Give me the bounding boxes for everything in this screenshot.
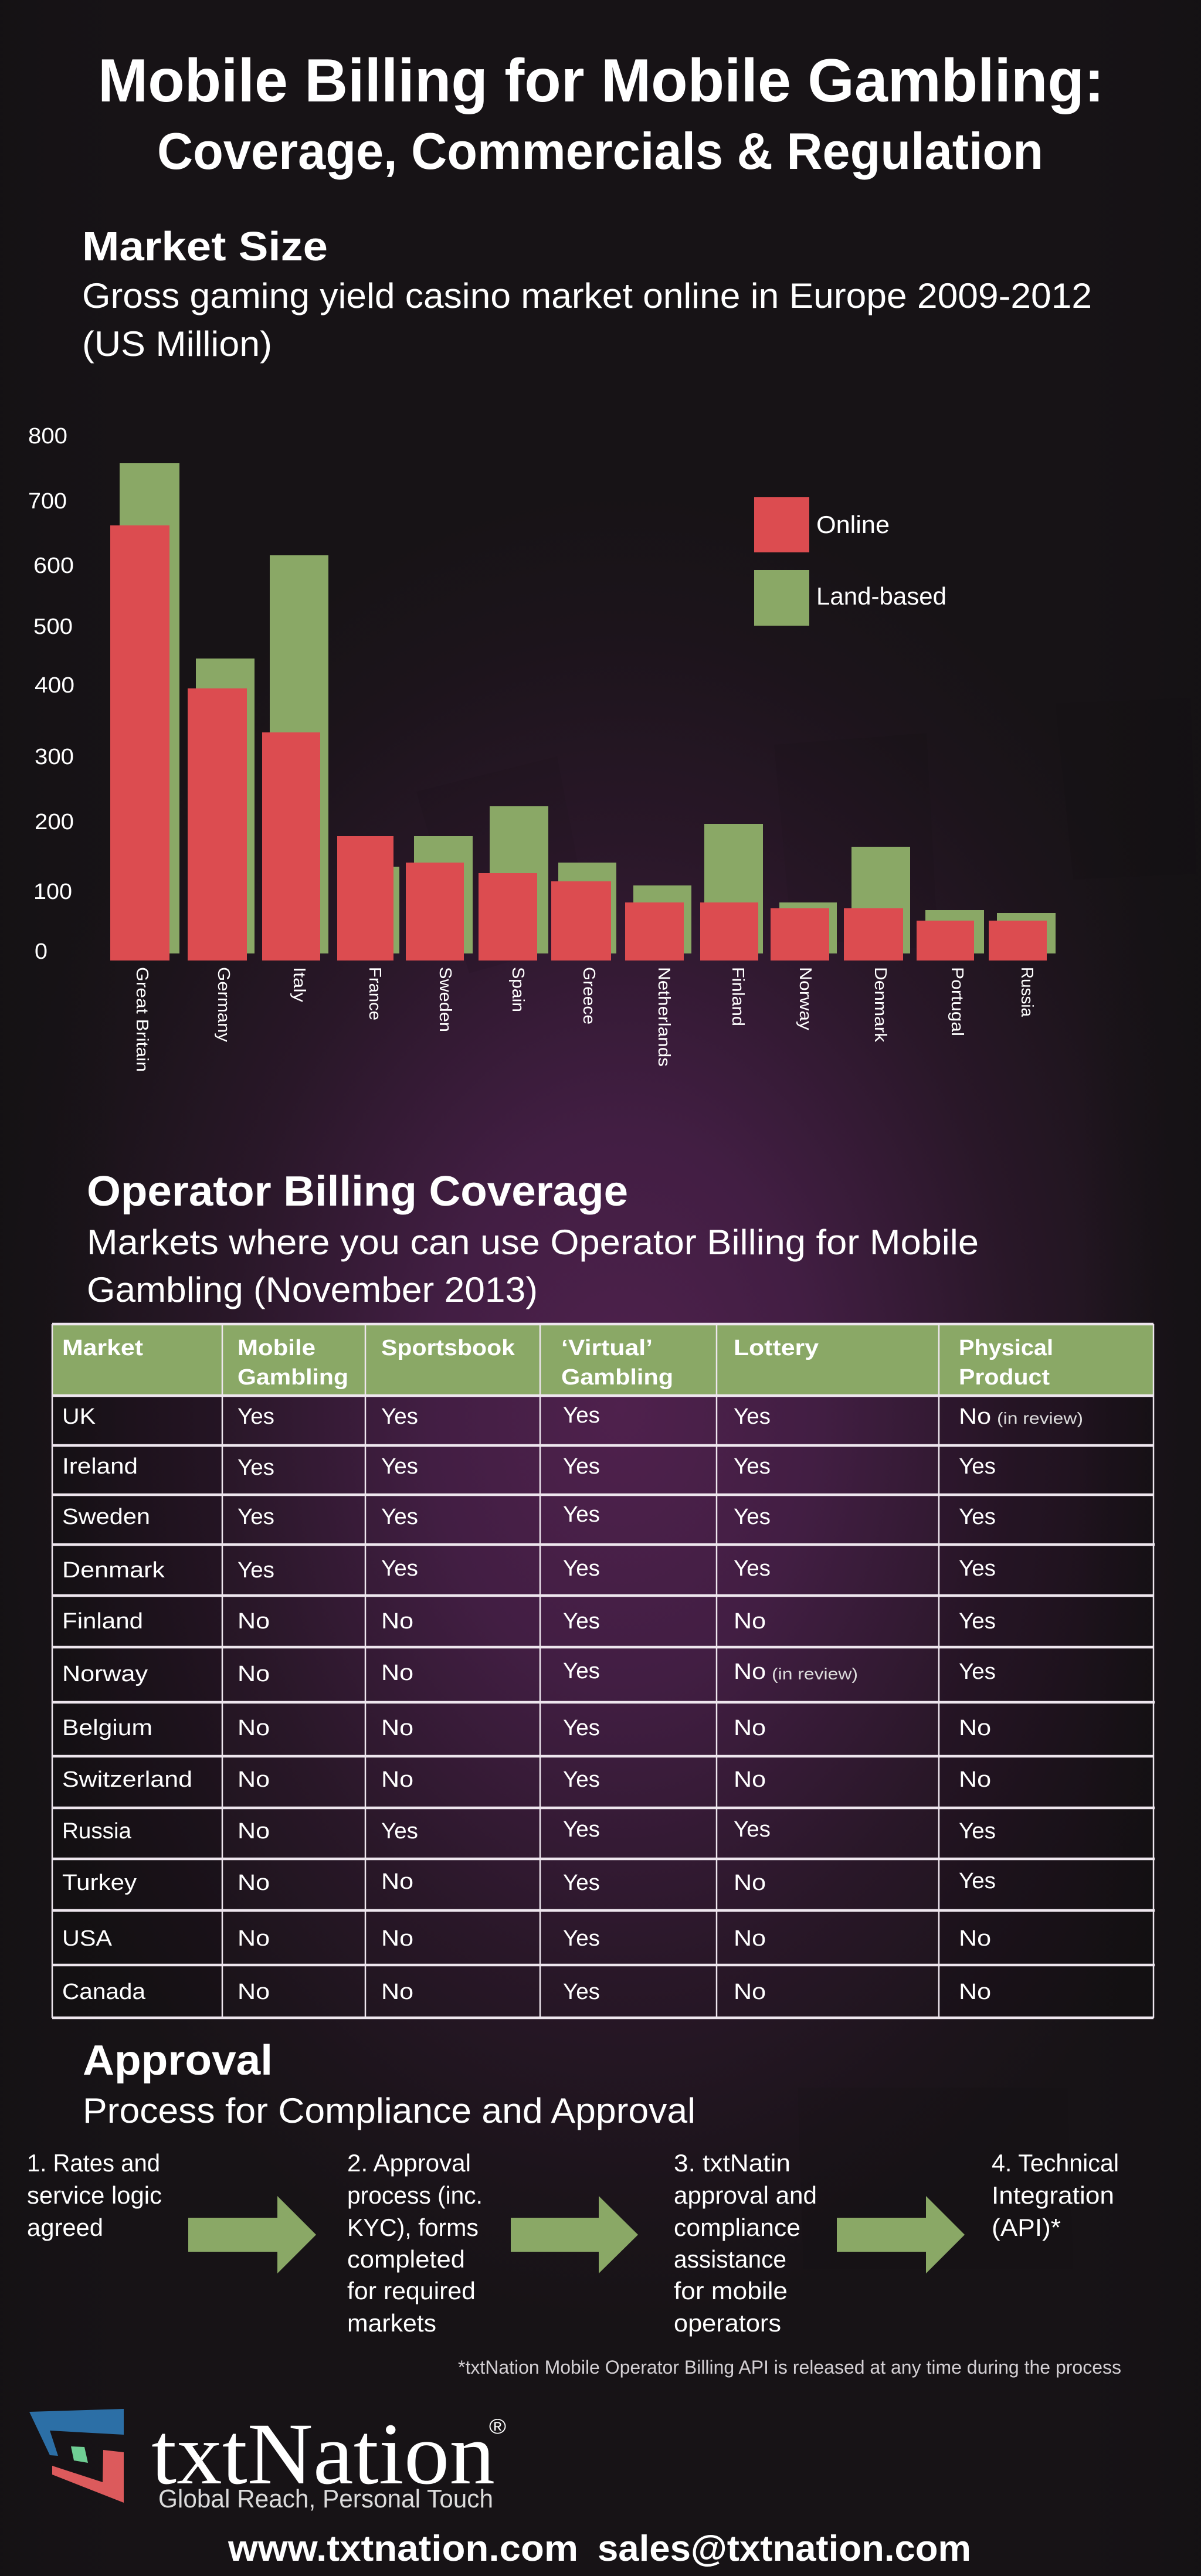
step 2 text: process (inc. bbox=[347, 2181, 483, 2209]
row: Switzerland: No bbox=[381, 1767, 413, 1792]
row: Belgium bbox=[62, 1716, 991, 1740]
row: Finland: Yes bbox=[563, 1609, 600, 1634]
step 3 text: compliance bbox=[674, 2214, 800, 2241]
heading: market size: Gross gaming yield casino market online in Europe 2009-2012 bbox=[82, 276, 1092, 315]
contact details bbox=[228, 2529, 971, 2569]
country labels: Denmark bbox=[871, 967, 890, 1043]
legend bbox=[754, 497, 946, 626]
row: UK: Yes bbox=[238, 1404, 274, 1429]
row: Russia: Yes bbox=[734, 1817, 771, 1842]
row: Denmark: Yes bbox=[238, 1558, 274, 1583]
step 4 text: 4. Technical bbox=[992, 2149, 1119, 2177]
row: Belgium: No bbox=[959, 1716, 991, 1740]
row: Sweden: Yes bbox=[238, 1505, 274, 1529]
row: Sweden: Sweden bbox=[62, 1505, 150, 1529]
step 1 text: service logic bbox=[27, 2181, 162, 2209]
country labels: France bbox=[365, 967, 384, 1020]
country labels: Sweden bbox=[436, 967, 454, 1032]
y axis labels: 400 bbox=[35, 673, 74, 698]
row: UK bbox=[62, 1403, 1083, 1429]
row: Turkey: Yes bbox=[563, 1871, 600, 1895]
table header: Mobile bbox=[238, 1336, 315, 1360]
country labels: Germany bbox=[214, 967, 233, 1043]
row: Ireland: Yes bbox=[959, 1454, 996, 1479]
row: USA: USA bbox=[62, 1926, 113, 1951]
footnote: *txtNation Mobile Operator Billing API is released at any time during the process bbox=[458, 2357, 1121, 2378]
row: Norway bbox=[62, 1659, 996, 1686]
step 3 text: assistance bbox=[674, 2245, 786, 2273]
row: Denmark: Yes bbox=[381, 1556, 418, 1581]
row: Canada bbox=[62, 1980, 991, 2004]
row: Finland: Yes bbox=[959, 1609, 996, 1634]
logo bbox=[29, 2405, 506, 2513]
row: Norway: Yes bbox=[959, 1659, 996, 1684]
country labels: Norway bbox=[796, 967, 815, 1031]
step 1 text bbox=[27, 2149, 162, 2241]
row: Canada: No bbox=[238, 1980, 270, 2004]
row: UK: No bbox=[959, 1404, 991, 1429]
y axis labels: 300 bbox=[35, 745, 74, 769]
row: Switzerland: No bbox=[238, 1767, 270, 1792]
row: Belgium: No bbox=[734, 1716, 766, 1740]
heading: market size: (US Million) bbox=[82, 324, 272, 364]
step 3 text: operators bbox=[674, 2309, 781, 2337]
step 4 text: (API)* bbox=[992, 2214, 1061, 2241]
arrow 2 bbox=[511, 2196, 638, 2273]
row: Sweden: Yes bbox=[734, 1505, 771, 1529]
row: UK: Yes bbox=[381, 1404, 418, 1429]
row: Belgium: Yes bbox=[563, 1716, 600, 1740]
arrow 1 bbox=[188, 2196, 316, 2273]
row: Turkey: Yes bbox=[959, 1869, 996, 1893]
heading: operator billing coverage: Operator Billing Coverage bbox=[87, 1168, 628, 1215]
table grid bbox=[52, 1324, 1155, 2018]
row: Canada: Canada bbox=[62, 1980, 146, 2004]
table header: Physical bbox=[959, 1336, 1053, 1360]
country labels: Spain bbox=[508, 967, 527, 1012]
step 2 text: KYC), forms bbox=[347, 2214, 479, 2241]
row: Finland bbox=[62, 1609, 996, 1634]
step 4 text: Integration bbox=[992, 2181, 1114, 2209]
heading: operator billing coverage: Markets where you can use Operator Billing for Mobile bbox=[87, 1223, 979, 1262]
row: Turkey: No bbox=[238, 1871, 270, 1895]
row: Sweden bbox=[62, 1502, 996, 1529]
row: Russia: Yes bbox=[381, 1819, 418, 1844]
contact details: www.txtnation.com bbox=[228, 2529, 578, 2569]
table header: ‘Virtual’ bbox=[561, 1336, 653, 1360]
table: coverage bbox=[52, 1324, 1155, 2018]
country labels: Portugal bbox=[948, 967, 966, 1036]
online bars bbox=[110, 525, 1047, 961]
step 2 text bbox=[347, 2149, 483, 2337]
country labels: Netherlands bbox=[654, 967, 673, 1067]
row: Switzerland: Switzerland bbox=[62, 1767, 192, 1792]
y axis labels bbox=[28, 424, 74, 964]
legend: Online bbox=[816, 511, 890, 538]
icon: txtNation mark bbox=[29, 2409, 124, 2503]
contact details: sales@txtnation.com bbox=[598, 2529, 971, 2569]
table header bbox=[52, 1324, 1153, 1396]
row: Ireland: Yes bbox=[734, 1454, 771, 1479]
table header: Gambling bbox=[238, 1365, 348, 1390]
row: Sweden: Yes bbox=[563, 1502, 600, 1527]
row: Finland: No bbox=[381, 1609, 413, 1634]
table header: Product bbox=[959, 1365, 1050, 1390]
row: Norway: No bbox=[734, 1659, 766, 1684]
title: Coverage, Commercials & Regulation bbox=[157, 122, 1043, 180]
row: Turkey bbox=[62, 1869, 996, 1895]
step 1 text: agreed bbox=[27, 2214, 103, 2241]
row: Canada: No bbox=[959, 1980, 991, 2004]
step 3 text bbox=[674, 2149, 817, 2337]
step 3 text: 3. txtNatin bbox=[674, 2149, 791, 2177]
row: Turkey: Turkey bbox=[62, 1871, 137, 1895]
row: Russia bbox=[62, 1817, 996, 1844]
row: Sweden: Yes bbox=[381, 1505, 418, 1529]
faint playing cards bbox=[416, 698, 1196, 2269]
bar chart: market size by country bbox=[28, 424, 1056, 1072]
row: Turkey: No bbox=[381, 1869, 413, 1894]
row: Ireland: Yes bbox=[563, 1454, 600, 1479]
heading: market size bbox=[82, 223, 1092, 364]
step 2 text: completed bbox=[347, 2245, 465, 2273]
heading: market size: Market Size bbox=[82, 223, 328, 269]
row: USA: No bbox=[381, 1926, 413, 1951]
row: Norway: Norway bbox=[62, 1662, 148, 1686]
heading: approval: Approval bbox=[83, 2037, 273, 2084]
row: UK: UK bbox=[62, 1404, 96, 1429]
row: Ireland: Ireland bbox=[62, 1454, 138, 1479]
table header: Gambling bbox=[561, 1365, 673, 1390]
step 2 text: for required bbox=[347, 2277, 476, 2305]
country labels: Greece bbox=[579, 967, 598, 1024]
row: Ireland bbox=[62, 1454, 996, 1480]
table header: Market bbox=[62, 1336, 143, 1360]
row: UK: Yes bbox=[563, 1403, 600, 1428]
country labels: Finland bbox=[728, 967, 747, 1026]
row: USA: No bbox=[734, 1926, 766, 1951]
y axis labels: 100 bbox=[33, 880, 72, 904]
row: Norway: No bbox=[381, 1661, 413, 1685]
row: UK: Yes bbox=[734, 1404, 771, 1429]
country labels bbox=[133, 967, 1036, 1072]
row: UK: (in review) bbox=[997, 1409, 1083, 1427]
row: Switzerland: No bbox=[734, 1767, 766, 1792]
y axis labels: 800 bbox=[28, 424, 67, 449]
row: Canada: No bbox=[381, 1980, 413, 2004]
step 2 text: markets bbox=[347, 2309, 436, 2337]
row: Norway: Yes bbox=[563, 1659, 600, 1684]
row: Denmark: Yes bbox=[734, 1556, 771, 1581]
step 4 text bbox=[992, 2149, 1119, 2241]
row: Finland: Finland bbox=[62, 1609, 143, 1634]
row: Switzerland: Yes bbox=[563, 1767, 600, 1792]
heading: operator billing coverage bbox=[87, 1168, 979, 1309]
heading: operator billing coverage: Gambling (November 2013) bbox=[87, 1270, 538, 1309]
row: Belgium: No bbox=[381, 1716, 413, 1740]
land-based bars bbox=[120, 463, 1056, 953]
row: Denmark: Yes bbox=[563, 1556, 600, 1581]
row: Canada: No bbox=[734, 1980, 766, 2004]
row: Russia: Yes bbox=[563, 1817, 600, 1842]
step 2 text: 2. Approval bbox=[347, 2149, 471, 2177]
y axis labels: 0 bbox=[35, 939, 48, 964]
row: Sweden: Yes bbox=[959, 1505, 996, 1529]
table header: Lottery bbox=[734, 1336, 819, 1360]
row: USA bbox=[62, 1926, 991, 1951]
row: Denmark bbox=[62, 1556, 996, 1583]
row: Ireland: Yes bbox=[238, 1455, 274, 1480]
row: Turkey: No bbox=[734, 1871, 766, 1895]
step 3 text: approval and bbox=[674, 2181, 817, 2209]
table header: Sportsbook bbox=[381, 1336, 515, 1360]
row: Belgium: No bbox=[238, 1716, 270, 1740]
row: Russia: Yes bbox=[959, 1819, 996, 1844]
row: Canada: Yes bbox=[563, 1980, 600, 2004]
country labels: Italy bbox=[290, 967, 308, 1003]
row: Switzerland bbox=[62, 1767, 991, 1792]
y axis labels: 700 bbox=[28, 489, 67, 514]
title: Mobile Billing for Mobile Gambling: bbox=[98, 47, 1104, 115]
title bbox=[98, 47, 1104, 180]
y axis labels: 600 bbox=[33, 554, 74, 578]
wordmark: txtNation bbox=[151, 2405, 495, 2503]
country labels: Russia bbox=[1017, 967, 1036, 1017]
row: Russia: Russia bbox=[62, 1819, 132, 1844]
row: Norway: No bbox=[238, 1662, 270, 1686]
y axis labels: 500 bbox=[33, 615, 73, 639]
tagline: Global Reach, Personal Touch bbox=[158, 2485, 493, 2513]
row: Denmark: Denmark bbox=[62, 1558, 165, 1583]
row: USA: No bbox=[959, 1926, 991, 1951]
row: Ireland: Yes bbox=[381, 1454, 418, 1479]
row: Belgium: Belgium bbox=[62, 1716, 152, 1740]
row: USA: Yes bbox=[563, 1926, 600, 1951]
row: Finland: No bbox=[238, 1609, 270, 1634]
step 1 text: 1. Rates and bbox=[27, 2149, 160, 2177]
country labels: Great Britain bbox=[133, 967, 151, 1072]
legend: Land-based bbox=[816, 582, 946, 610]
row: Russia: No bbox=[238, 1819, 270, 1844]
row: Norway: (in review) bbox=[772, 1665, 858, 1683]
row: Switzerland: No bbox=[959, 1767, 991, 1792]
row: Denmark: Yes bbox=[959, 1556, 996, 1581]
heading: approval bbox=[83, 2037, 696, 2130]
registered mark: ® bbox=[489, 2414, 506, 2438]
step 3 text: for mobile bbox=[674, 2277, 788, 2305]
arrow 3 bbox=[837, 2196, 965, 2273]
heading: approval: Process for Compliance and Approval bbox=[83, 2091, 696, 2130]
row: USA: No bbox=[238, 1926, 270, 1951]
row: Finland: No bbox=[734, 1609, 766, 1634]
y axis labels: 200 bbox=[35, 810, 74, 834]
